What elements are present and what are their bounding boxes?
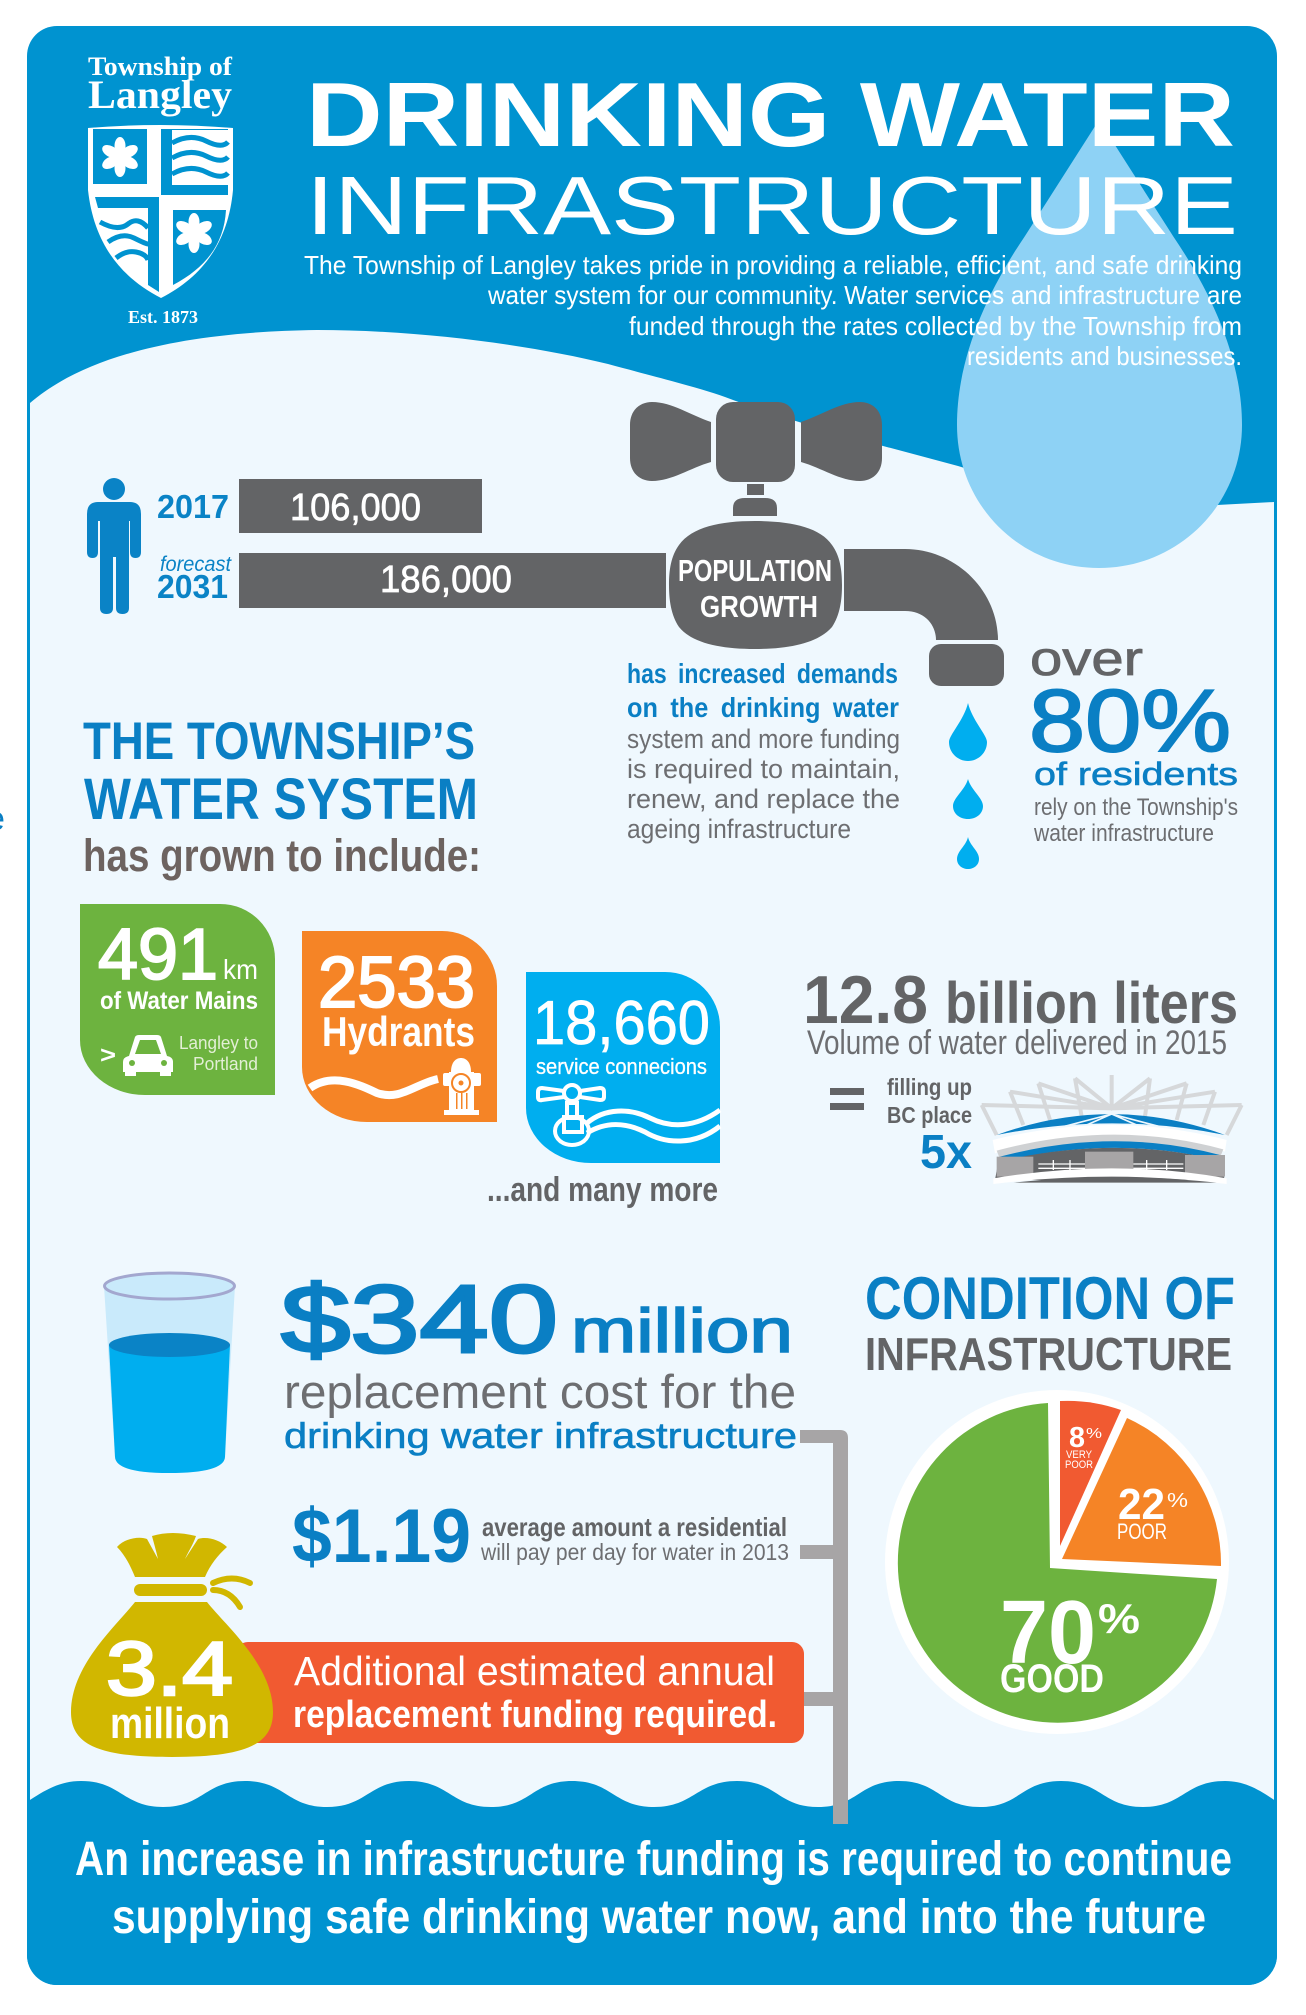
icon: valve and water waves: [538, 1085, 720, 1145]
pie labels: 70: [1000, 1583, 1096, 1683]
card: water mains: >: [100, 1042, 116, 1069]
icon: money bag: 3.4: [106, 1627, 233, 1712]
pie labels: VERY: [1066, 1449, 1093, 1461]
stat: 12.8 billion liters: filling up: [887, 1074, 972, 1100]
callout: additional funding: Additional estimated annual: [294, 1648, 775, 1694]
tap label: POPULATION: [678, 553, 832, 588]
callout: additional funding: replacement funding required.: [293, 1694, 777, 1736]
text: increased demands: on the drinking water: [627, 692, 899, 723]
stat: over 80% of residents: of residents: [1034, 756, 1238, 792]
bottom banner waves: [27, 1781, 1277, 1985]
heading: the township's water system: THE TOWNSHIP’S: [83, 712, 475, 771]
stat: $340 million: $340: [281, 1266, 558, 1373]
text: increased demands: [627, 658, 900, 844]
stat: $1.19: will pay per day for water in 2013: [480, 1539, 789, 1565]
card: hydrants: 2533: [318, 943, 475, 1023]
pie labels: 8: [1069, 1422, 1085, 1454]
pie labels: %: [1098, 1595, 1140, 1642]
connector bracket: [800, 1430, 848, 1824]
logo wordmark: Est. 1873: [128, 307, 198, 327]
logo wordmark: Langley: [88, 72, 232, 117]
pie labels: GOOD: [1000, 1657, 1104, 1701]
card: water mains: [80, 904, 275, 1095]
intro paragraph: The Township of Langley takes pride in providing a reliable, efficient, and safe drinking: [304, 250, 1242, 280]
pie labels: %: [1167, 1490, 1188, 1512]
stat: 12.8 billion liters: BC place: [887, 1102, 972, 1128]
stat: $340 million: [281, 1266, 797, 1456]
icon: money bag: [71, 1533, 273, 1757]
icon: water tap: [630, 402, 1004, 686]
logo wordmark: Township of: [88, 52, 232, 81]
population growth bars: [157, 479, 666, 608]
card: water mains: Langley to: [179, 1033, 258, 1053]
card: water mains: 491: [98, 915, 218, 995]
pie labels: [1000, 1422, 1188, 1701]
title: DRINKING WATER: [306, 65, 1235, 166]
icon: falling drops: [949, 703, 987, 869]
text: increased demands: system and more funding: [627, 724, 900, 754]
card: service connections: 18,660: [533, 989, 710, 1058]
icon: hydrant: [443, 1058, 481, 1115]
stat: 12.8 billion liters: 5x: [920, 1126, 972, 1179]
icon: money bag: million: [110, 1699, 230, 1748]
pie labels: %: [1086, 1425, 1102, 1442]
intro paragraph: residents and businesses.: [967, 341, 1242, 371]
intro paragraph: funded through the rates collected by the Township from: [629, 311, 1242, 341]
icon: large water drop: [957, 120, 1242, 568]
card: water mains: km: [223, 954, 258, 985]
pie labels: POOR: [1117, 1519, 1167, 1544]
logo shield: [88, 125, 233, 298]
card: water mains: of Water Mains: [100, 987, 258, 1015]
title: [306, 65, 1238, 252]
logo wordmark: [88, 52, 232, 327]
slice: poor 22%: [1062, 1418, 1221, 1566]
stat: $1.19: average amount a residential: [482, 1512, 787, 1542]
equals sign: [830, 1088, 864, 1110]
stat: $340 million: replacement cost for the: [284, 1365, 796, 1418]
stat: 12.8 billion liters: billion liters: [945, 971, 1238, 1036]
pie labels: 22: [1118, 1480, 1165, 1529]
text: increased demands: renew, and replace the: [627, 784, 900, 814]
callout: additional funding: [236, 1642, 804, 1743]
stat: over 80% of residents: rely on the Township's: [1034, 794, 1238, 821]
value: 106,000: 106,000: [290, 487, 421, 529]
heading: the township's water system: WATER SYSTEM: [84, 767, 478, 832]
icon: glass of water: [104, 1273, 235, 1473]
icon: car: [123, 1035, 173, 1076]
stat: $1.19: $1.19: [292, 1494, 471, 1579]
card: hydrants: Hydrants: [322, 1008, 475, 1055]
intro paragraph: water system for our community. Water services and infrastructure are: [487, 280, 1242, 310]
stat: 12.8 billion liters: 12.8: [803, 962, 928, 1038]
text: and many more: ...and many more: [487, 1171, 718, 1209]
closing statement: [75, 1833, 1232, 1944]
card: water mains: Portland: [193, 1054, 258, 1074]
tap label: GROWTH: [700, 589, 818, 624]
panel: light body with wave top: [30, 330, 1274, 1820]
slice: very poor 8%: [1060, 1401, 1121, 1546]
stat: $340 million: drinking water infrastructure: [284, 1415, 797, 1456]
tap label: [678, 553, 832, 624]
bar: 2017: [239, 479, 482, 533]
heading: the township's water system: has grown to include:: [83, 830, 481, 881]
logo: Township of Langley: [88, 52, 233, 327]
text: increased demands: is required to maintain,: [627, 754, 900, 784]
card: service connections: service connecions: [536, 1054, 707, 1079]
heading: condition of infrastructure: CONDITION OF: [865, 1265, 1235, 1332]
label: 2031: 2031: [157, 568, 228, 605]
pie labels: POOR: [1065, 1459, 1093, 1471]
card: service connections: [526, 972, 720, 1163]
stat: 12.8 billion liters: Volume of water delivered in 2015: [807, 1024, 1227, 1062]
bar: 2031: [239, 553, 666, 608]
stat: over 80% of residents: over: [1030, 633, 1143, 686]
card: hydrants: [302, 931, 497, 1122]
stat: over 80% of residents: water infrastructure: [1033, 820, 1214, 847]
label: 2017: 2017: [157, 488, 229, 525]
icon: person: [87, 478, 141, 614]
text: increased demands: ageing infrastructure: [627, 814, 851, 844]
stat: $340 million: million: [571, 1297, 793, 1366]
label: forecast: forecast: [160, 553, 232, 576]
value: 186,000: 186,000: [380, 559, 512, 601]
heading: condition of infrastructure: [865, 1265, 1235, 1380]
slice: good 70%: [898, 1403, 1217, 1723]
heading: the township's water system: [83, 712, 481, 881]
heading: condition of infrastructure: INFRASTRUCTURE: [865, 1328, 1232, 1380]
pie chart: condition: [885, 1390, 1229, 1734]
intro paragraph: [304, 250, 1242, 371]
title: INFRASTRUCTURE: [306, 159, 1238, 252]
text: increased demands: has increased demands: [627, 658, 898, 689]
stat: over 80% of residents: [1029, 633, 1238, 847]
stat: 12.8 billion liters: [803, 962, 1238, 1179]
icon: BC Place stadium: [982, 1075, 1242, 1184]
stat: $1.19: [292, 1494, 789, 1579]
stat: over 80% of residents: 80%: [1029, 671, 1231, 770]
